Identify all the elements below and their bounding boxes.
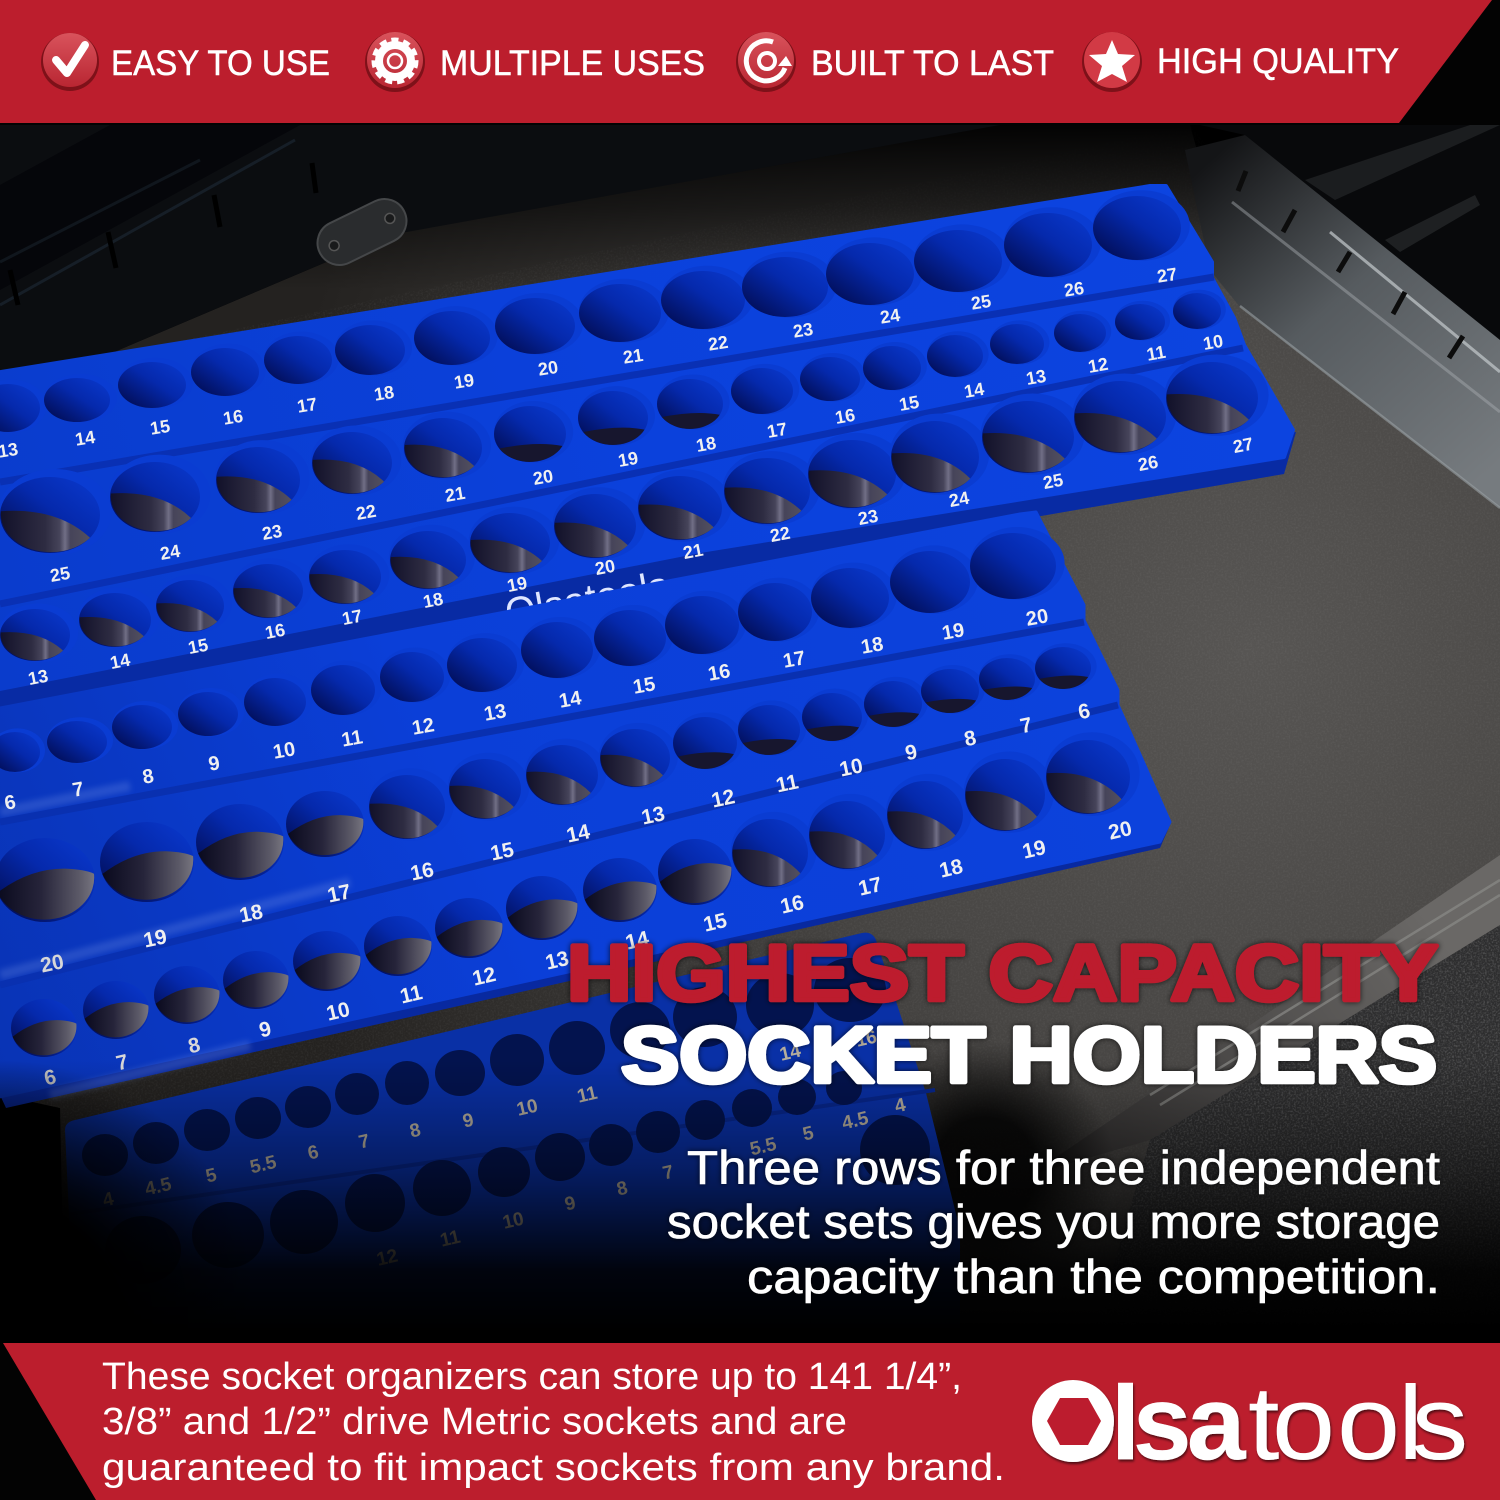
rack 2 row 2 size labels: 17 bbox=[325, 880, 353, 908]
rack 1 row 1 size labels: 15 bbox=[149, 416, 172, 439]
rack 2 row 2 size labels: 10 bbox=[837, 754, 865, 782]
icon: gear with circular arrow bbox=[736, 32, 796, 92]
rack 2 row 1 size labels: 13 bbox=[482, 700, 508, 726]
logo: Olsatools: tools bbox=[1248, 1365, 1468, 1482]
rack 1 row 3 size labels: 22 bbox=[768, 523, 792, 546]
footer description: 3/8” and 1/2” drive Metric sockets and are bbox=[102, 1401, 847, 1443]
rack 1 row 3 size labels: 25 bbox=[1041, 470, 1065, 493]
rack 2 front face bbox=[0, 825, 1170, 1108]
rack 2 row 2 size labels: 12 bbox=[709, 785, 737, 813]
rack 2 row 3 size labels: 10 bbox=[324, 998, 352, 1026]
rack 2 row 1 size labels: 7 bbox=[71, 778, 86, 802]
second socket rack (three rows, 6-20 mm) bbox=[0, 512, 1170, 1108]
rack 2 row 1 size labels: 18 bbox=[859, 633, 885, 659]
rack 2 row 2 size labels: 14 bbox=[564, 820, 592, 848]
third rack size labels: 4.5 bbox=[143, 1174, 174, 1200]
rack 1 row 1 size labels: 17 bbox=[296, 394, 319, 417]
badge: easy to use: EASY TO USE bbox=[111, 44, 330, 83]
rack 1 shadow and front face bbox=[0, 432, 1296, 715]
rack 1 row 2 size labels: 22 bbox=[354, 501, 378, 524]
rack 1 row 3 size labels: 14 bbox=[108, 650, 132, 673]
rack 1 row 1 size labels: 22 bbox=[707, 332, 730, 355]
top shadow over mat bbox=[0, 125, 1500, 290]
third rack size labels: 7 bbox=[661, 1162, 676, 1185]
third rack size labels: 8 bbox=[615, 1178, 630, 1201]
headline line 2: SOCKET HOLDERS bbox=[621, 1010, 1437, 1099]
rack 1 row 1 sockets bbox=[0, 190, 1190, 432]
rack 1 row 2 size labels: 25 bbox=[48, 563, 72, 586]
black left corner below racks bbox=[0, 1095, 65, 1345]
third rack size labels: 4 bbox=[101, 1189, 116, 1212]
rack 1 row 3 sockets bbox=[0, 354, 1269, 662]
rack 1 row 3 size labels bbox=[26, 434, 1255, 689]
logo: Olsatools: lsa bbox=[1111, 1365, 1247, 1482]
badge: built to last bbox=[736, 32, 1054, 92]
rack 1 row dividers bbox=[0, 277, 1243, 604]
rack 1 top surface bbox=[0, 186, 1293, 690]
rack 2 row 2 size labels: 7 bbox=[1018, 713, 1034, 738]
third rack size labels: 8 bbox=[408, 1120, 423, 1143]
rack 2 row 2 size labels: 15 bbox=[488, 838, 516, 866]
rack 1 row 1 size labels: 16 bbox=[222, 406, 245, 429]
rack 2 row 3 size labels: 20 bbox=[1106, 817, 1134, 845]
light metal strip and carpet at bottom right bbox=[1080, 855, 1500, 1202]
rack 1 row 1 size labels: 20 bbox=[537, 357, 560, 380]
icon: check mark bbox=[41, 33, 99, 91]
rack 2 row 3 size labels: 19 bbox=[1020, 836, 1048, 864]
footer description: guaranteed to fit impact sockets from any brand. bbox=[102, 1447, 1005, 1489]
rack 1 row 2 size labels bbox=[48, 331, 1225, 586]
drawer rail, dark right corner bbox=[1200, 125, 1500, 345]
rack 2 row dividers bbox=[0, 622, 1118, 985]
headline bbox=[567, 928, 1438, 1099]
headline line 1: HIGHEST CAPACITY bbox=[567, 928, 1438, 1017]
rack 2 row 1 size labels: 11 bbox=[340, 726, 365, 752]
rack 2 row 1 size labels: 16 bbox=[706, 660, 732, 686]
rack 1 row 1 size labels: 14 bbox=[74, 427, 97, 450]
rack 1 row 2 size labels: 13 bbox=[1024, 366, 1048, 389]
description text: capacity than the competition. bbox=[747, 1250, 1440, 1303]
rack 1 row 1 size labels: 23 bbox=[792, 319, 815, 342]
third rack size labels: 11 bbox=[575, 1083, 600, 1108]
icon: gear bbox=[365, 32, 425, 92]
gray metal tray edge with hinge bbox=[1185, 135, 1500, 508]
rack 2 row 3 size labels: 9 bbox=[257, 1017, 273, 1042]
mounting plate bbox=[310, 192, 414, 272]
rack 2 row 3 size labels: 11 bbox=[398, 981, 425, 1009]
rack 1 row 3 size labels: 15 bbox=[186, 635, 210, 658]
rack 2 row 2 size labels: 11 bbox=[774, 770, 801, 797]
rack 2 row 1 sockets bbox=[0, 527, 1065, 772]
rack 1 row 3 size labels: 20 bbox=[593, 556, 617, 579]
third rack size labels: 7 bbox=[357, 1131, 372, 1154]
rack 1 row 1 size labels: 21 bbox=[622, 345, 645, 368]
rack 2 row 1 size labels: 6 bbox=[3, 791, 18, 815]
badge: multiple uses bbox=[365, 32, 705, 92]
third rack size labels: 5 bbox=[204, 1165, 219, 1188]
rack 2 row 2 size labels: 20 bbox=[38, 950, 66, 978]
rack 2 row 2 size labels: 13 bbox=[639, 802, 667, 830]
rack 2 row 3 size labels bbox=[42, 817, 1134, 1090]
badge: built to last: BUILT TO LAST bbox=[811, 44, 1054, 83]
rack 1 row 2 size labels: 10 bbox=[1201, 331, 1225, 354]
rack 1 row 3 size labels: 16 bbox=[263, 620, 287, 643]
third rack size labels: 5 bbox=[801, 1123, 816, 1146]
description text: socket sets gives you more storage bbox=[667, 1195, 1440, 1248]
rack 2 row 2 size labels bbox=[38, 699, 1092, 978]
third rack size labels: 4.5 bbox=[840, 1108, 871, 1134]
rack 1 row 2 size labels: 18 bbox=[694, 433, 718, 456]
rack 1 row 2 size labels: 16 bbox=[833, 405, 857, 428]
rack 2 row 2 size labels: 6 bbox=[1076, 699, 1092, 724]
footer description bbox=[102, 1356, 1005, 1489]
rack 2 row 1 size labels: 17 bbox=[781, 647, 807, 673]
rack 2 row 2 size labels: 9 bbox=[903, 740, 919, 765]
icon: star bbox=[1082, 32, 1142, 92]
rack 1 row 2 size labels: 23 bbox=[260, 521, 284, 544]
rack 1 row 3 size labels: 13 bbox=[26, 666, 50, 689]
first socket rack (three rows, 10-27 mm) bbox=[0, 186, 1296, 715]
rack 1 row 1 size labels: 27 bbox=[1156, 264, 1179, 287]
rack 1 row 2 size labels: 12 bbox=[1086, 354, 1110, 377]
rack 2 row 1 size labels: 8 bbox=[141, 765, 156, 789]
badge: high quality: HIGH QUALITY bbox=[1157, 42, 1399, 81]
rack 2 row 1 size labels bbox=[3, 605, 1050, 815]
rack 2 row 1 size labels: 19 bbox=[940, 619, 966, 645]
rack 1 row 1 size labels: 18 bbox=[373, 382, 396, 405]
badge: easy to use bbox=[41, 33, 330, 91]
third rack size labels: 16 bbox=[854, 1027, 879, 1052]
rack 1 row 2 size labels: 11 bbox=[1145, 342, 1167, 365]
third rack size labels: 5.5 bbox=[248, 1152, 279, 1178]
rack 2 row 1 size labels: 9 bbox=[207, 752, 222, 776]
third socket rack, partly faded bbox=[65, 933, 960, 1345]
rack 2 row 2 sockets bbox=[0, 643, 1097, 922]
logo: Olsatools: O bbox=[1040, 1369, 1118, 1481]
rack 1 row 1 size labels: 26 bbox=[1063, 278, 1086, 301]
rack 1 row 3 size labels: 19 bbox=[505, 573, 529, 596]
logo: Olsatools bbox=[1032, 1365, 1468, 1482]
rack 2 row 3 sockets bbox=[11, 732, 1140, 1057]
rack 2 row 3 size labels: 15 bbox=[701, 909, 729, 937]
description text bbox=[667, 1141, 1440, 1303]
brand mark on rack: Olsatools bbox=[501, 562, 672, 637]
rack 2 row 3 size labels: 7 bbox=[114, 1050, 130, 1075]
third rack size labels: 10 bbox=[515, 1096, 540, 1121]
third rack size labels: 6 bbox=[306, 1142, 321, 1165]
rack 2 row 3 size labels: 16 bbox=[778, 891, 806, 919]
third rack size labels: 14 bbox=[778, 1040, 803, 1066]
badge: multiple uses: MULTIPLE USES bbox=[440, 44, 705, 83]
footer description: These socket organizers can store up to 141 1/4”, bbox=[102, 1356, 962, 1398]
rack 2 row 3 size labels: 13 bbox=[543, 947, 571, 975]
rack 1 row 3 size labels: 18 bbox=[421, 589, 445, 612]
rack 2 row 2 size labels: 8 bbox=[962, 726, 979, 751]
rack 1 row 3 size labels: 21 bbox=[681, 540, 705, 563]
rack 2 row 1 size labels: 14 bbox=[557, 687, 584, 713]
top red banner bbox=[0, 0, 1492, 123]
rack 2 row 3 size labels: 17 bbox=[856, 873, 884, 901]
rack 2 row 1 size labels: 15 bbox=[631, 673, 657, 699]
third rack size labels: 5.5 bbox=[748, 1134, 779, 1160]
rack 1 row 2 size labels: 21 bbox=[443, 483, 467, 506]
rack 2 top surface bbox=[0, 512, 1170, 1098]
rack 1 row 3 size labels: 26 bbox=[1136, 452, 1160, 475]
rack 2 row 1 size labels: 10 bbox=[271, 738, 297, 764]
rack 1 row 1 size labels: 25 bbox=[970, 291, 993, 314]
rack 1 row 1 size labels: 24 bbox=[879, 305, 902, 328]
third rack size labels: 4 bbox=[893, 1095, 908, 1118]
rack 1 row 3 size labels: 24 bbox=[947, 488, 971, 511]
rack 1 row 3 size labels: 27 bbox=[1231, 434, 1255, 457]
third rack size labels: 10 bbox=[501, 1209, 526, 1234]
third rack size labels: 11 bbox=[438, 1227, 463, 1252]
foam mat texture bbox=[96, 260, 1499, 1102]
rack 2 row 1 size labels: 12 bbox=[410, 714, 436, 740]
rack 2 row 2 size labels: 19 bbox=[141, 925, 169, 953]
rack 2 row 1 size labels: 20 bbox=[1024, 605, 1050, 631]
third rack size labels: 9 bbox=[461, 1110, 476, 1133]
rack 2 row 3 size labels: 6 bbox=[42, 1065, 58, 1090]
dark tool chest wall with hinge and plate bbox=[0, 125, 1000, 400]
rack 2 row 2 size labels: 18 bbox=[237, 900, 265, 928]
rack 2 row 2 size labels: 16 bbox=[408, 858, 436, 886]
badge: high quality bbox=[1082, 32, 1399, 92]
rack 2 row 3 size labels: 14 bbox=[623, 927, 651, 955]
rack 2 row 3 size labels: 18 bbox=[937, 855, 965, 883]
rack 1 row 2 sockets bbox=[0, 290, 1226, 555]
third rack size labels: 12 bbox=[375, 1246, 400, 1271]
rack 1 row 3 size labels: 17 bbox=[340, 606, 364, 629]
rack 2 row 3 size labels: 12 bbox=[470, 963, 498, 991]
rack 1 row 3 size labels: 23 bbox=[856, 506, 880, 529]
rack 1 row 1 size labels bbox=[0, 264, 1179, 462]
rack 1 row 2 size labels: 15 bbox=[897, 392, 921, 415]
third rack size labels bbox=[101, 1027, 908, 1271]
rack 1 row 2 size labels: 24 bbox=[158, 541, 182, 564]
rack 1 row 2 size labels: 14 bbox=[962, 379, 986, 402]
description text: Three rows for three independent bbox=[687, 1141, 1440, 1194]
rack 1 row 2 size labels: 19 bbox=[616, 448, 640, 471]
bottom red banner bbox=[3, 1343, 1500, 1500]
rack 1 row 1 size labels: 19 bbox=[453, 370, 476, 393]
rack 1 row 2 size labels: 20 bbox=[531, 466, 555, 489]
photo fade overlays bbox=[0, 1050, 1500, 1350]
shadow right of third rack bbox=[850, 1040, 1120, 1310]
rack 1 row 2 size labels: 17 bbox=[765, 419, 789, 442]
third rack size labels: 9 bbox=[563, 1193, 578, 1216]
rack 2 row 3 size labels: 8 bbox=[186, 1033, 203, 1058]
